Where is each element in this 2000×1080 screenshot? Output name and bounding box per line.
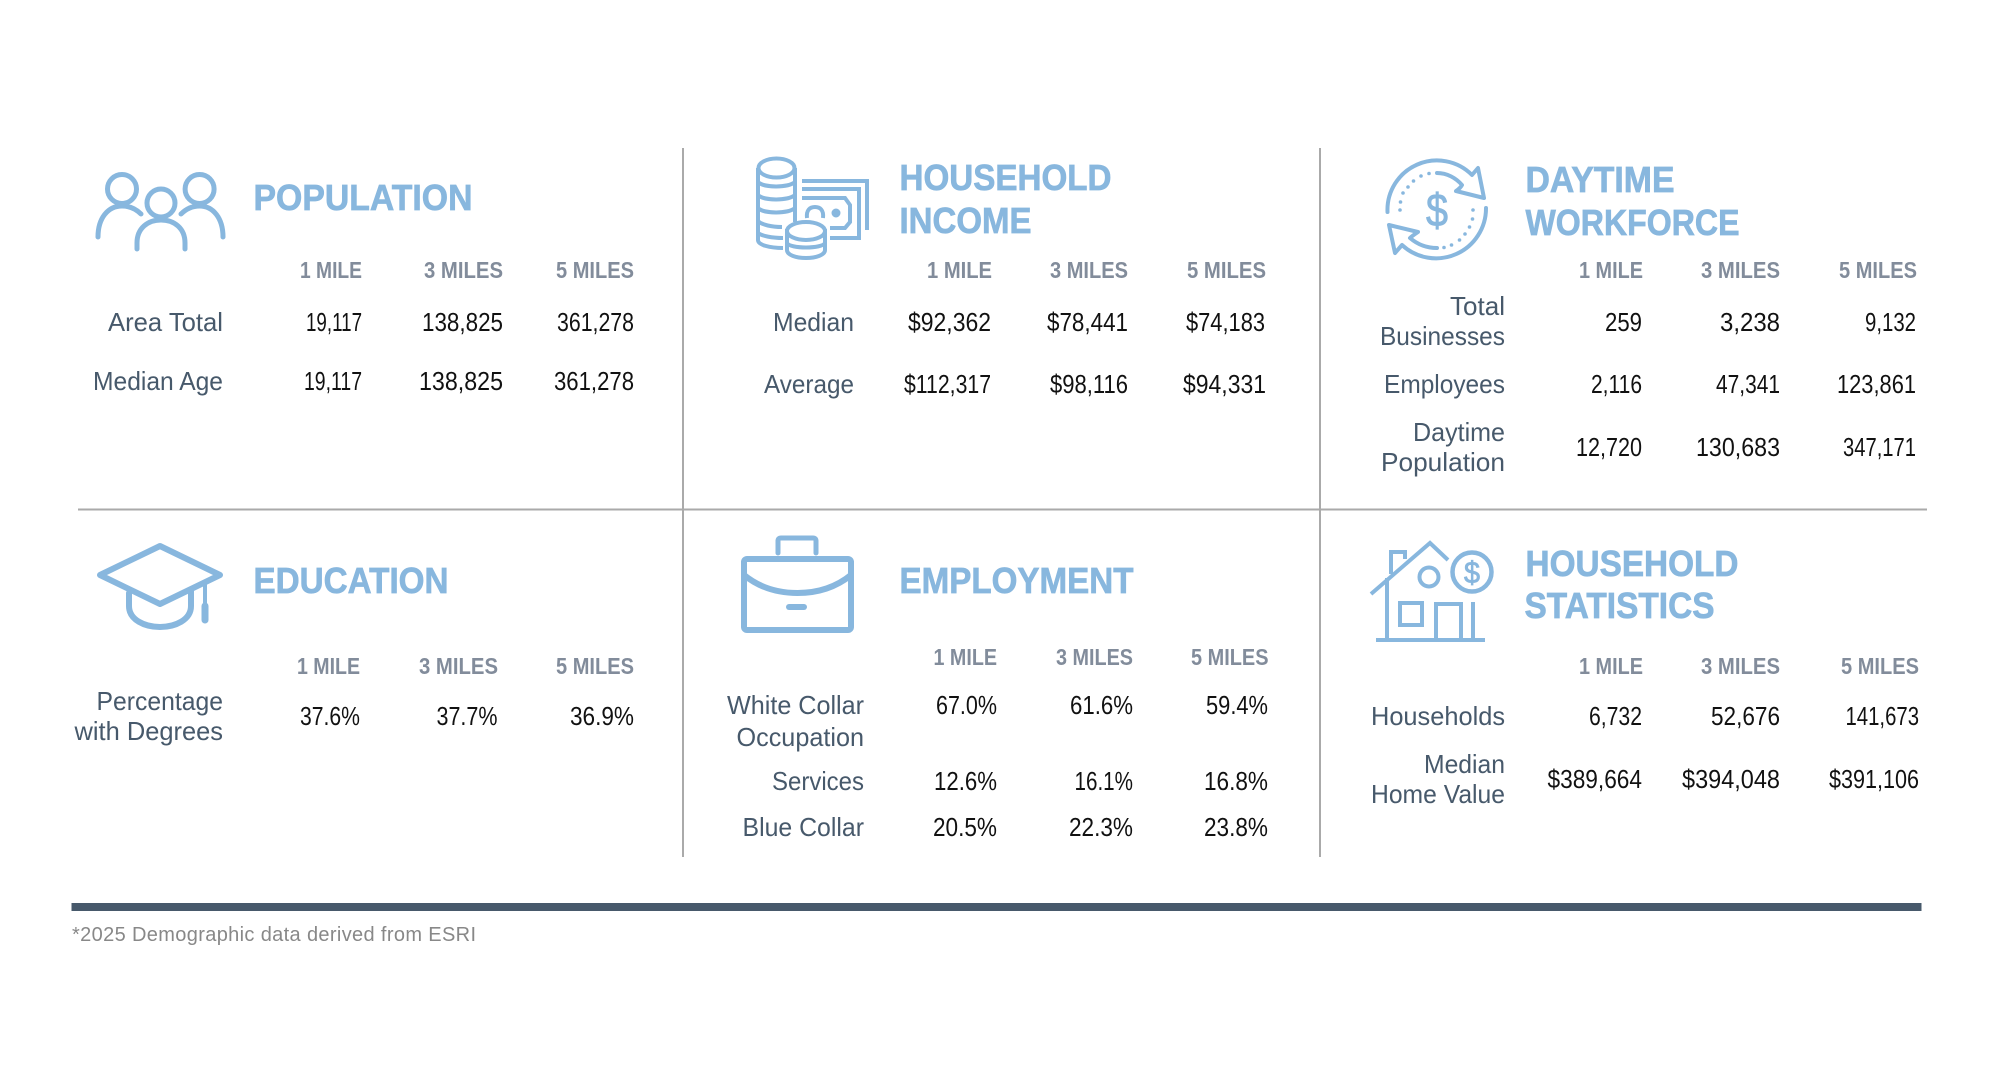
icon: house with dollar coin: $ <box>1464 555 1480 590</box>
row: area total: 138,825 <box>422 307 503 337</box>
row: total businesses: Businesses <box>1380 321 1505 351</box>
row: median: $78,441 <box>1047 307 1128 337</box>
column headers: 3 MILES <box>1050 257 1128 283</box>
column headers: 5 MILES <box>1187 257 1266 283</box>
column headers: 1 MILE <box>934 644 997 670</box>
row: services: 16.8% <box>1204 766 1268 796</box>
row: daytime population: 130,683 <box>1696 432 1780 462</box>
icon: circular arrows with dollar: $ <box>1426 184 1448 236</box>
row: median: $92,362 <box>908 307 991 337</box>
column headers: 3 MILES <box>1701 257 1780 283</box>
row: median home value: $389,664 <box>1548 764 1642 794</box>
row: employees <box>1384 369 1916 399</box>
row: services <box>772 766 1268 796</box>
row: daytime population: Population <box>1381 447 1505 477</box>
icon: briefcase <box>744 538 851 630</box>
column headers: 1 MILE <box>300 257 362 283</box>
row: percentage with degrees: 36.9% <box>570 701 634 731</box>
panel: household income <box>758 157 1266 399</box>
row: daytime population <box>1381 417 1916 477</box>
row: median: Median <box>773 307 854 337</box>
column headers: 5 MILES <box>1839 257 1917 283</box>
column headers: 3 MILES <box>1056 644 1133 670</box>
row: average: $94,331 <box>1183 369 1266 399</box>
row: daytime population: Daytime <box>1413 417 1505 447</box>
row: daytime population: 347,171 <box>1843 432 1916 462</box>
column headers: 3 MILES <box>424 257 503 283</box>
row: blue collar: 23.8% <box>1204 812 1268 842</box>
column headers: 1 MILE <box>297 653 360 679</box>
icon: people <box>98 174 223 249</box>
icon: graduation cap <box>100 546 220 627</box>
panel: education <box>74 546 634 746</box>
row: households <box>1371 701 1919 731</box>
heading: household statistics: STATISTICS <box>1524 585 1714 626</box>
row: average: $112,317 <box>904 369 991 399</box>
icon: coins and cash <box>758 158 867 258</box>
column headers: 5 MILES <box>1191 644 1268 670</box>
row: white collar occupation <box>727 690 1268 752</box>
row: white collar occupation: 67.0% <box>936 690 997 720</box>
heading: household income: HOUSEHOLD <box>900 157 1112 198</box>
row: percentage with degrees <box>74 686 634 746</box>
row: total businesses: Total <box>1450 291 1505 321</box>
footnote: *2025 Demographic data derived from ESRI <box>72 924 476 946</box>
column headers: 3 MILES <box>419 653 498 679</box>
row: median: $74,183 <box>1186 307 1265 337</box>
row: area total: 19,117 <box>306 307 362 337</box>
column headers: 1 MILE <box>927 257 992 283</box>
row: white collar occupation: White Collar <box>727 690 864 720</box>
row: median age: 19,117 <box>304 366 362 396</box>
heading: education: EDUCATION <box>254 560 448 601</box>
dotted ring <box>1398 172 1475 249</box>
row: blue collar: 20.5% <box>933 812 997 842</box>
row: blue collar: 22.3% <box>1069 812 1133 842</box>
row: blue collar: Blue Collar <box>742 812 864 842</box>
row: median age: 138,825 <box>419 366 503 396</box>
row: employees: 47,341 <box>1716 369 1780 399</box>
row: daytime population: 12,720 <box>1576 432 1642 462</box>
row: services: 16.1% <box>1074 766 1133 796</box>
panel: employment <box>727 538 1268 842</box>
row: percentage with degrees: Percentage <box>96 686 223 716</box>
row: white collar occupation: 61.6% <box>1070 690 1133 720</box>
panel: population <box>93 174 634 396</box>
icon: circular arrows with dollar <box>1387 160 1486 258</box>
row: households: Households <box>1371 701 1505 731</box>
row: median <box>773 307 1265 337</box>
column headers <box>934 644 1268 670</box>
row: area total <box>108 307 634 337</box>
row: total businesses: 9,132 <box>1865 307 1916 337</box>
row: median home value: $391,106 <box>1829 764 1919 794</box>
row: blue collar <box>742 812 1268 842</box>
heading: household income <box>900 157 1112 241</box>
row: white collar occupation: 59.4% <box>1206 690 1268 720</box>
row: median home value: Home Value <box>1371 779 1505 809</box>
column headers: 1 MILE <box>1579 257 1643 283</box>
row: area total: 361,278 <box>557 307 634 337</box>
row: average: $98,116 <box>1050 369 1128 399</box>
row: services: 12.6% <box>934 766 997 796</box>
row: white collar occupation: Occupation <box>736 722 864 752</box>
column headers <box>927 257 1266 283</box>
panel: daytime workforce <box>1380 159 1917 477</box>
footer rule <box>72 903 1922 911</box>
heading: employment: EMPLOYMENT <box>900 560 1134 601</box>
column headers: 1 MILE <box>1579 653 1643 679</box>
row: total businesses: 259 <box>1605 307 1642 337</box>
row: total businesses: 3,238 <box>1720 307 1780 337</box>
column headers: 5 MILES <box>1841 653 1919 679</box>
row: employees: 2,116 <box>1591 369 1642 399</box>
row: percentage with degrees: 37.6% <box>300 701 360 731</box>
row: median home value <box>1371 749 1919 809</box>
row: households: 6,732 <box>1589 701 1642 731</box>
row: median home value: Median <box>1424 749 1505 779</box>
icon: house with dollar coin <box>1371 543 1492 640</box>
heading: household statistics: HOUSEHOLD <box>1526 543 1738 584</box>
row: median home value: $394,048 <box>1682 764 1780 794</box>
row: average <box>764 369 1266 399</box>
column headers <box>1579 653 1919 679</box>
heading: daytime workforce: DAYTIME <box>1526 159 1674 200</box>
column headers <box>297 653 634 679</box>
column headers: 5 MILES <box>556 653 634 679</box>
row: average: Average <box>764 369 854 399</box>
column headers: 3 MILES <box>1701 653 1780 679</box>
row: area total: Area Total <box>108 307 223 337</box>
heading: daytime workforce <box>1526 159 1740 243</box>
heading: household income: INCOME <box>900 200 1032 241</box>
row: percentage with degrees: 37.7% <box>436 701 498 731</box>
row: total businesses <box>1380 291 1916 351</box>
heading: daytime workforce: WORKFORCE <box>1526 202 1740 243</box>
row: services: Services <box>772 766 864 796</box>
row: median age: 361,278 <box>554 366 634 396</box>
heading: household statistics <box>1524 543 1738 626</box>
column headers: 5 MILES <box>556 257 634 283</box>
column headers <box>1579 257 1917 283</box>
row: employees: Employees <box>1384 369 1505 399</box>
row: households: 141,673 <box>1846 701 1919 731</box>
panel: household statistics <box>1371 543 1919 809</box>
heading: population: POPULATION <box>254 177 472 218</box>
row: median age <box>93 366 634 396</box>
row: households: 52,676 <box>1711 701 1780 731</box>
row: percentage with degrees: with Degrees <box>74 716 223 746</box>
column headers <box>300 257 634 283</box>
row: employees: 123,861 <box>1837 369 1916 399</box>
row: median age: Median Age <box>93 366 223 396</box>
